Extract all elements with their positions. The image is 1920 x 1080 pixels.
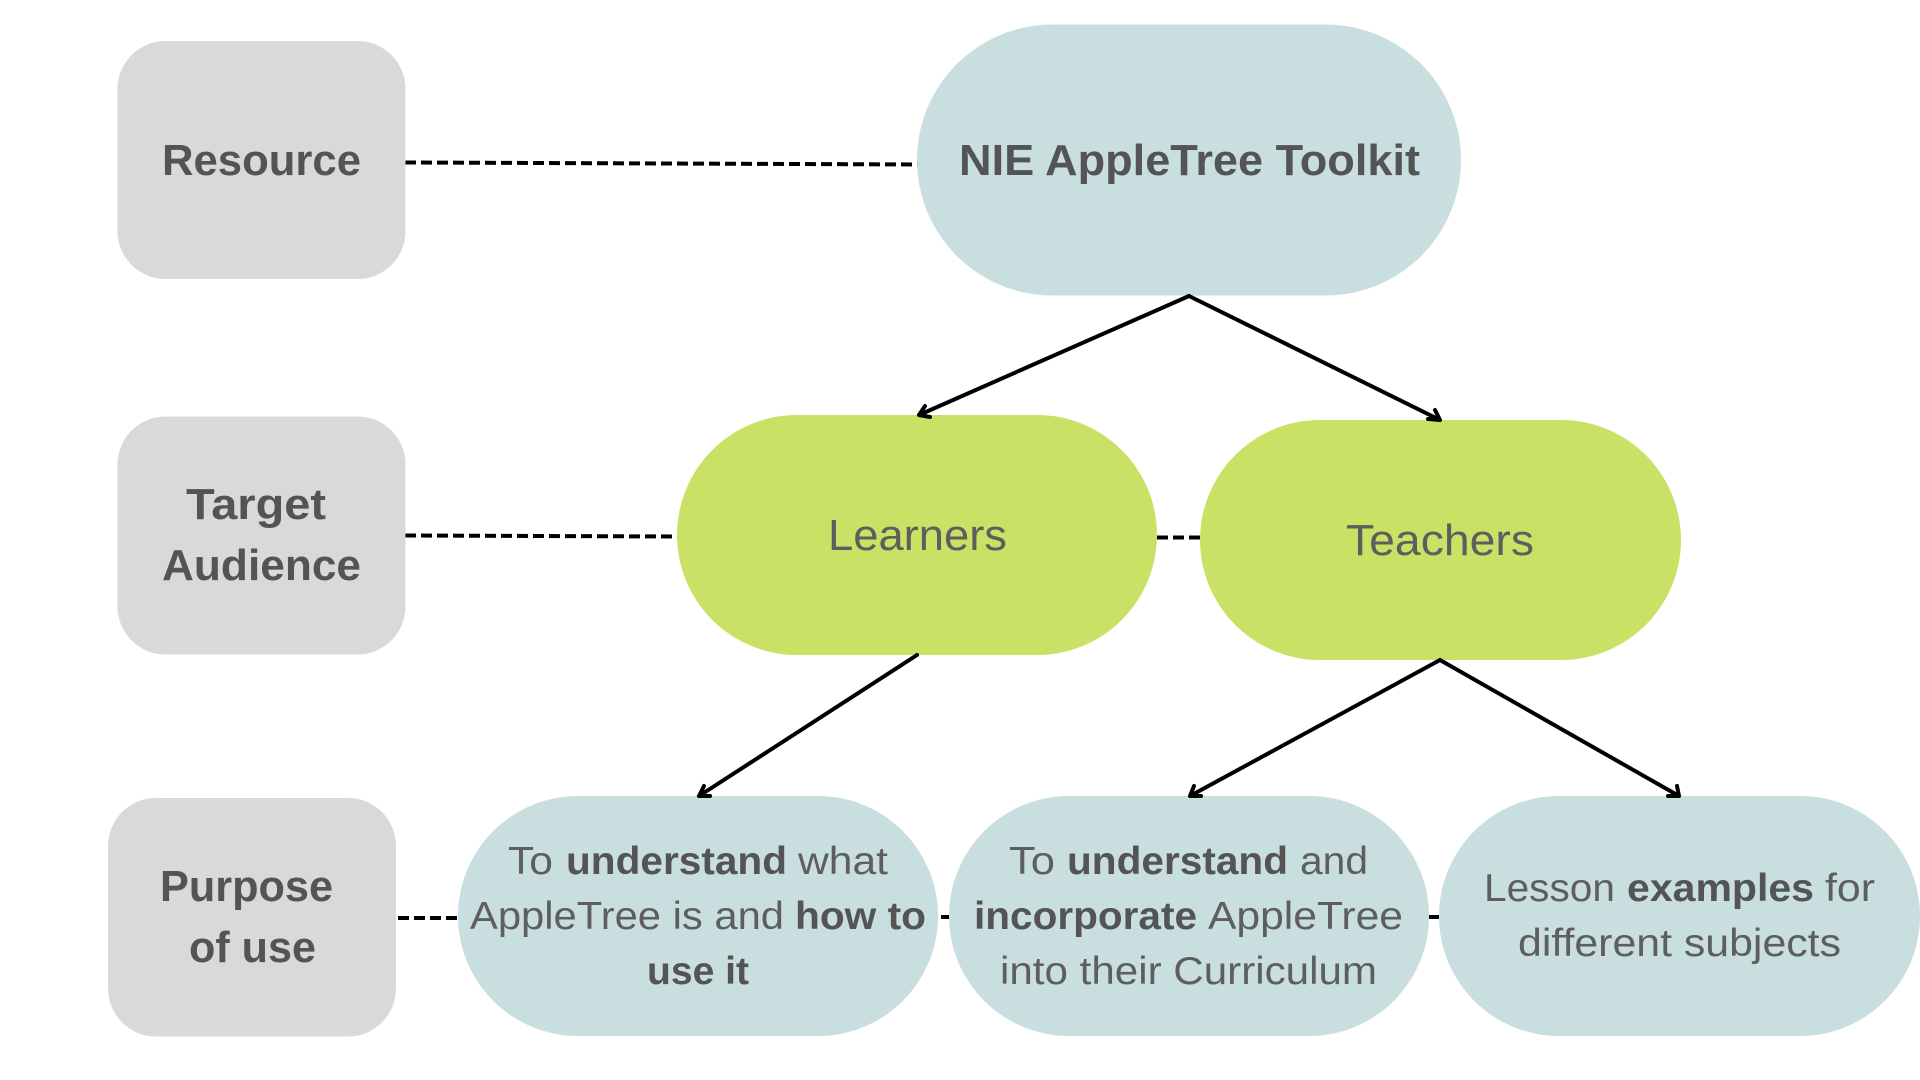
- panel: resource label: [118, 41, 406, 279]
- arrow: teachers to third use: [1440, 660, 1679, 796]
- panel: NIE AppleTree Toolkit: [917, 24, 1461, 296]
- panel: target audience label: [118, 416, 406, 654]
- connector: target audience to learners: [405, 536, 680, 537]
- panel: learners purpose: use it: [647, 950, 749, 993]
- panel: teachers purpose curriculum: and: [1300, 840, 1368, 883]
- panel: teachers purpose lesson examples: examples: [1627, 867, 1814, 910]
- panel: teachers purpose curriculum: [949, 796, 1429, 1036]
- panel: teachers: Teachers: [1346, 516, 1534, 565]
- panel: teachers purpose lesson examples: for: [1825, 867, 1875, 910]
- panel: teachers purpose lesson examples: different subjects: [1518, 922, 1841, 965]
- panel: learners purpose: understand: [566, 840, 787, 883]
- panel: teachers purpose curriculum: To: [1009, 840, 1055, 883]
- panel: learners purpose: To: [508, 840, 553, 883]
- panel: learners purpose: [458, 796, 938, 1036]
- connector: purpose to first use: [398, 916, 460, 920]
- panel: target audience label: Audience: [162, 541, 361, 590]
- connector: learners to teachers: [1157, 536, 1200, 540]
- panel: learners purpose: what: [797, 840, 888, 883]
- panel: teachers purpose lesson examples: Lesson: [1484, 867, 1615, 910]
- panel: teachers purpose lesson examples: [1439, 796, 1920, 1036]
- panel: learners purpose: AppleTree is and: [470, 895, 784, 938]
- connector: second use to third use: [1429, 915, 1439, 919]
- arrow: toolkit to learners: [919, 296, 1189, 417]
- connector: first use to second use: [941, 915, 949, 919]
- panel: NIE AppleTree Toolkit: NIE AppleTree Toolkit: [959, 136, 1420, 185]
- panel: purpose of use label: [108, 798, 396, 1036]
- panel: resource label: Resource: [162, 136, 361, 185]
- panel: teachers purpose curriculum: into their Curriculum: [1000, 950, 1377, 993]
- arrow: teachers to second use: [1190, 660, 1440, 796]
- panel: teachers purpose curriculum: understand: [1067, 840, 1288, 883]
- arrow: toolkit to teachers: [1189, 296, 1440, 420]
- panel: purpose of use label: of use: [189, 923, 316, 972]
- panel: learners: [677, 415, 1157, 655]
- panel: teachers purpose curriculum: AppleTree: [1208, 895, 1403, 938]
- panel: learners purpose: how to: [795, 895, 926, 938]
- panel: teachers: [1200, 420, 1681, 660]
- connector: resource to toolkit: [405, 162, 920, 164]
- panel: target audience label: Target: [186, 480, 326, 529]
- panel: purpose of use label: Purpose: [160, 862, 333, 911]
- arrow: learners to first use: [699, 655, 917, 796]
- panel: learners: Learners: [828, 511, 1007, 560]
- panel: teachers purpose curriculum: incorporate: [974, 895, 1197, 938]
